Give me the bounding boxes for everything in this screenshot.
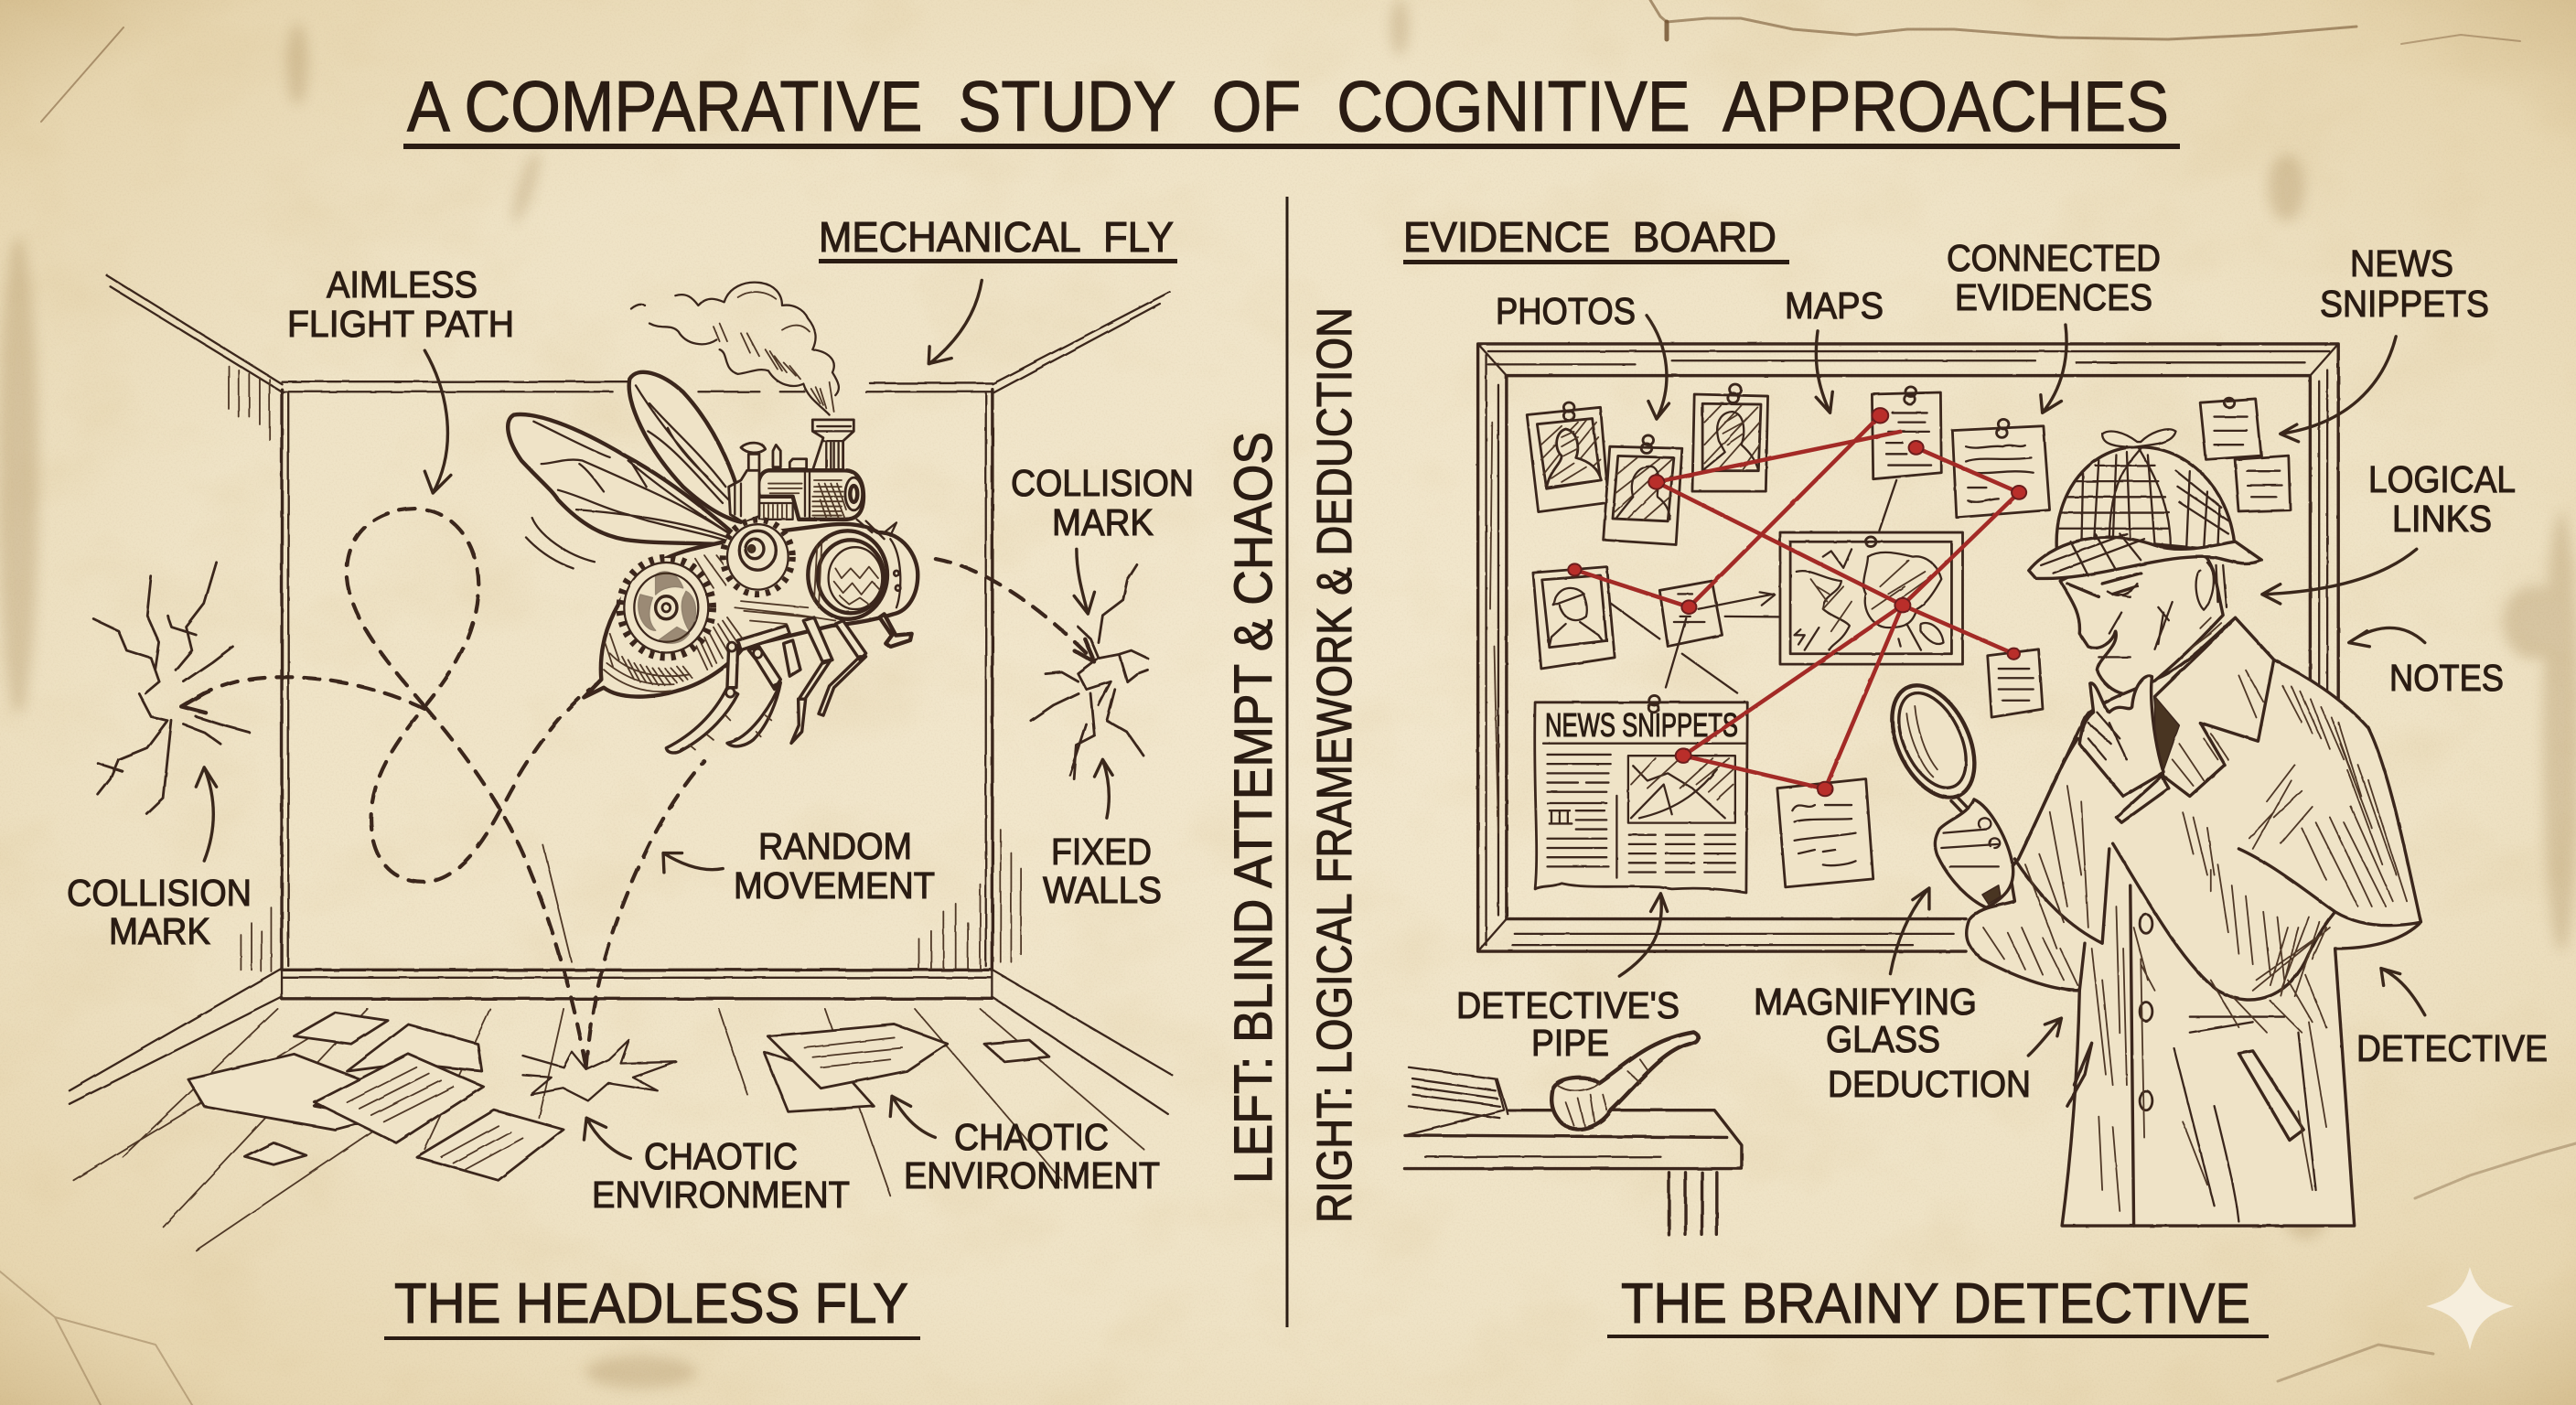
label: connected evidences: CONNECTED <box>1947 237 2161 279</box>
label: chaotic environment centre: ENVIRONMENT <box>592 1174 850 1216</box>
label: chaotic environment right: CHAOTIC <box>954 1116 1109 1158</box>
icon: sparkle watermark <box>2426 1267 2514 1350</box>
label: magnifying glass deduction <box>1754 981 2031 1105</box>
label: maps: MAPS <box>1785 284 1884 327</box>
label: logical links: LOGICAL <box>2368 458 2516 500</box>
collision mark crack, right wall <box>1031 564 1148 779</box>
floor debris: scattered papers and impact mark <box>188 1013 1049 1180</box>
detective figure <box>1967 429 2420 1226</box>
label: news snippets <box>2320 242 2489 325</box>
arrows for the fly panel <box>196 280 1112 1158</box>
label: news snippets: SNIPPETS <box>2320 283 2489 325</box>
icon: steam engine on thorax <box>729 420 864 522</box>
chin-resting hand <box>2079 676 2163 796</box>
label: connected evidences <box>1947 237 2161 318</box>
room walls, ceiling and floor <box>70 275 1172 1250</box>
label: connected evidences: EVIDENCES <box>1955 276 2152 318</box>
label: random movement: MOVEMENT <box>734 864 935 906</box>
newspaper clipping with news snippets <box>1535 695 1873 893</box>
label: magnifying glass deduction: MAGNIFYING <box>1754 981 1977 1023</box>
label: detective's pipe: DETECTIVE'S <box>1456 984 1680 1026</box>
label: magnifying glass deduction: DEDUCTION <box>1828 1063 2031 1105</box>
label: chaotic environment right: ENVIRONMENT <box>904 1154 1160 1196</box>
magnifying glass and holding hand <box>1876 674 2013 907</box>
label: aimless flight path: AIMLESS <box>327 263 478 306</box>
label: collision mark right: COLLISION <box>1011 462 1194 504</box>
label: collision mark right <box>1011 462 1194 543</box>
label: aimless flight path: FLIGHT PATH <box>287 303 514 345</box>
board heading text: news snippets: NEWS SNIPPETS <box>1545 706 1738 744</box>
collision mark crack, left wall <box>94 563 249 814</box>
label: detective's pipe <box>1456 984 1680 1064</box>
label: logical links <box>2368 458 2516 540</box>
face and head <box>2060 550 2227 694</box>
label: aimless flight path <box>287 263 514 345</box>
heading: evidence board: EVIDENCE BOARD <box>1403 213 1776 261</box>
label: random movement <box>734 825 935 906</box>
label: detective's pipe: PIPE <box>1531 1022 1609 1064</box>
caption: the headless fly: THE HEADLESS FLY <box>394 1272 908 1335</box>
label: collision mark left: COLLISION <box>67 872 252 914</box>
small notes behind detective <box>2200 398 2291 511</box>
arrows for the detective panel <box>1619 316 2425 1056</box>
title: A COMPARATIVE STUDY OF COGNITIVE APPROACHES <box>407 66 2169 146</box>
center divider <box>1286 197 1288 1327</box>
label: chaotic environment centre: CHAOTIC <box>644 1135 798 1177</box>
icon: fly legs <box>666 617 866 753</box>
detective's pipe, book and table <box>1404 1032 1742 1235</box>
mechanical fly <box>508 283 918 753</box>
label: magnifying glass deduction: GLASS <box>1826 1018 1940 1060</box>
label: photos: PHOTOS <box>1496 290 1636 332</box>
aimless flight path and random movement dashed lines <box>181 509 1094 1067</box>
label: notes: NOTES <box>2389 657 2504 699</box>
coat body <box>1967 617 2420 1226</box>
icon: fly body with gears and eye <box>584 520 918 697</box>
notes and map on the board <box>1611 387 2050 717</box>
icon: fly wings <box>508 372 750 568</box>
label: fixed walls: FIXED <box>1051 831 1152 873</box>
caption: the brainy detective: THE BRAINY DETECTIVE <box>1621 1272 2250 1335</box>
panel: the brainy detective <box>1403 213 2548 1338</box>
label: collision mark left <box>67 872 252 952</box>
label: news snippets: NEWS <box>2350 242 2453 284</box>
label: logical links: LINKS <box>2392 498 2492 540</box>
vertical caption: right logical framework and deduction: RIGHT: LOGICAL FRAMEWORK & DEDUCTION <box>1307 307 1362 1223</box>
label: fixed walls <box>1043 831 1162 911</box>
photos pinned to the board <box>1527 384 1768 669</box>
label: random movement: RANDOM <box>758 825 912 867</box>
evidence board frame <box>1478 344 2338 951</box>
deerstalker hat <box>2029 429 2261 578</box>
label: collision mark left: MARK <box>109 910 210 952</box>
label: detective: DETECTIVE <box>2356 1027 2548 1069</box>
label: collision mark right: MARK <box>1052 501 1154 543</box>
heading: mechanical fly: MECHANICAL FLY <box>819 213 1174 261</box>
label: chaotic environment right <box>904 1116 1160 1196</box>
vertical caption: left blind attempt and chaos: LEFT: BLIND ATTEMPT & CHAOS <box>1224 432 1283 1184</box>
red string logical links <box>1568 408 2026 796</box>
label: fixed walls: WALLS <box>1043 869 1162 911</box>
panel: the headless fly <box>67 213 1194 1340</box>
label: chaotic environment centre <box>592 1135 850 1216</box>
icon: steam cloud <box>631 283 839 415</box>
